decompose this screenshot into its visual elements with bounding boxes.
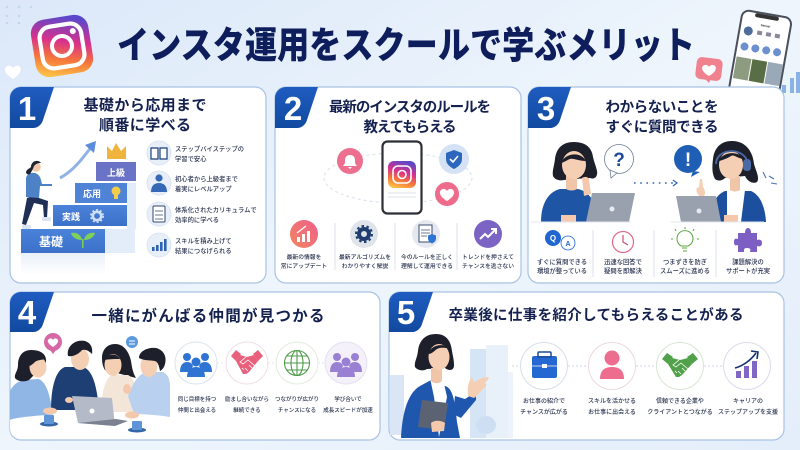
- heading 3: すぐに質問できる: [606, 119, 718, 136]
- benefit list 1: [147, 141, 257, 257]
- icon: crown: [107, 143, 126, 159]
- bubble: answer: [674, 145, 702, 177]
- features 5: お仕事に出会える: [588, 408, 636, 416]
- icon: people blue: [180, 353, 212, 377]
- icon: clock: [612, 232, 634, 252]
- panel 3: ask questions: [528, 87, 784, 283]
- features 4: 仲間と出会える: [178, 406, 216, 414]
- person A: [10, 379, 53, 421]
- heading 2: 最新のインスタのルールを: [329, 99, 491, 116]
- icon: bulb: [671, 227, 699, 251]
- person B: [51, 367, 99, 410]
- benefit list 1: 学習で安心: [175, 154, 207, 163]
- features 3: [537, 227, 771, 277]
- badge 5: 5: [397, 294, 415, 331]
- features 3: 疑問を即解決: [604, 266, 643, 275]
- icon: checklist: [153, 206, 165, 222]
- icon: instagram logo: [29, 13, 95, 79]
- person C: [102, 344, 136, 378]
- heading 4: 一緒にがんばる仲間が見つかる: [92, 306, 324, 325]
- businesswoman: [401, 334, 489, 438]
- badge 3: 3: [537, 90, 555, 127]
- heading 1: 基礎から応用まで: [84, 96, 206, 114]
- icon: handshake: [231, 350, 263, 374]
- panel 4: find companions: [10, 292, 380, 440]
- heading 2: 教えてもらえる: [364, 119, 456, 136]
- heading 1: 順番に学べる: [99, 116, 191, 134]
- features 4: 励まし合いながら: [225, 395, 269, 403]
- benefit list 1: 結果につなげられる: [175, 246, 232, 255]
- icon: bulb: [112, 186, 120, 199]
- features 5: スキルを活かせる: [588, 397, 636, 405]
- bubble: answer: !: [685, 150, 691, 171]
- cups: [40, 415, 146, 432]
- icon: shield: [439, 144, 469, 174]
- panel 1: basics to advanced: [10, 87, 266, 283]
- arrow: [60, 141, 96, 178]
- instructor with headset: [676, 141, 766, 222]
- icon: growth: [290, 220, 318, 248]
- features 3: 課題解決の: [732, 257, 764, 266]
- icon: gear: [91, 210, 103, 222]
- features 3: すぐに質問できる: [537, 257, 587, 266]
- person D: [128, 372, 170, 423]
- features 4: 継続できる: [233, 406, 261, 414]
- icon: trend: [474, 220, 502, 248]
- features 3: スムーズに進める: [660, 266, 710, 275]
- badge 5: [389, 292, 433, 332]
- group of learners: [10, 333, 170, 439]
- ground line: [531, 221, 764, 223]
- features 2: 最新アルゴリズムを: [339, 253, 391, 261]
- icon: handshake: [662, 353, 698, 377]
- staircase: 上級: [107, 167, 125, 178]
- icon: heart bubble: [44, 333, 62, 354]
- features 5: 信頼できる企業や: [656, 397, 704, 405]
- heading 5: 卒業後に仕事を紹介してもらえることがある: [448, 306, 744, 324]
- features 4: 成長スピードが加速: [323, 406, 373, 414]
- icon: globe: [284, 350, 310, 376]
- icon: Q&A: Q: [550, 234, 556, 243]
- features 3: サポートが充実: [726, 266, 771, 275]
- icon: learner: [151, 174, 167, 192]
- benefit list 1: スキルを積み上げて: [175, 236, 232, 245]
- staircase: [21, 143, 136, 275]
- icon: Q&A: A: [565, 241, 571, 248]
- bubble: question: [604, 144, 634, 178]
- bubble: question: ?: [613, 150, 625, 171]
- features 3: 環境が整っている: [537, 266, 587, 275]
- icon: gear: [350, 220, 378, 248]
- features 2: 理解して運用できる: [401, 262, 453, 270]
- features 5: チャンスが広がる: [520, 408, 568, 416]
- icon: smartphone: [726, 10, 792, 117]
- heading 1: [84, 96, 206, 134]
- panel 5: job introductions: [389, 292, 784, 440]
- table: [10, 413, 170, 439]
- benefit list 1: 初心者から上級者まで: [175, 174, 238, 183]
- icon: career chart: [735, 351, 758, 378]
- icon: puzzle: [734, 228, 762, 252]
- staircase: 応用: [83, 189, 101, 199]
- badge 1: [10, 87, 54, 128]
- features 4: 同じ目標を持つ: [178, 395, 217, 403]
- badge 4: 4: [18, 294, 37, 331]
- icon: heart speech bubble: [695, 56, 723, 83]
- icon: smartphone: Sensei: [760, 23, 771, 29]
- icon: briefcase: [532, 352, 557, 378]
- benefit list 1: 着実にレベルアップ: [175, 184, 232, 193]
- features 5: キャリアの: [733, 398, 763, 405]
- panel 2: latest instagram rules: [275, 87, 521, 283]
- icon: sprout: [71, 233, 95, 248]
- icon: growth bars: [782, 72, 800, 93]
- icon: chat bubble: [126, 336, 138, 348]
- heading 3: わからないことを: [606, 99, 718, 116]
- features 4: [175, 342, 373, 414]
- phone illustration: [324, 142, 472, 214]
- features 4: 学び合いで: [334, 395, 362, 403]
- badge 1: 1: [18, 90, 36, 127]
- title: インスタ運用をスクールで学ぶメリット: [117, 25, 695, 66]
- icon: people purple: [330, 353, 362, 377]
- features 2: 常にアップデート: [281, 262, 327, 270]
- icon: heart: [435, 182, 459, 206]
- dotted arrow: [634, 180, 677, 186]
- features 5: [512, 342, 778, 416]
- features 2: 最新の情報を: [287, 253, 322, 261]
- icon: person: [600, 350, 624, 379]
- benefit list 1: 体系化されたカリキュラムで: [175, 205, 257, 214]
- benefit list 1: 効率的に学べる: [175, 215, 219, 224]
- features 3: 迅速な回答で: [604, 257, 642, 266]
- person climbing: [22, 161, 52, 229]
- badge 3: [528, 87, 571, 128]
- student with laptop: [541, 142, 635, 222]
- badge 4: [10, 292, 54, 332]
- hands: [43, 384, 139, 418]
- icon: chart: [152, 239, 167, 251]
- badge 2: 2: [284, 90, 302, 127]
- features 2: チャンスを逃さない: [462, 262, 514, 270]
- heading 2: [329, 99, 491, 136]
- staircase: 実践: [62, 211, 80, 222]
- buildings: [390, 345, 513, 438]
- icon: book: [151, 148, 167, 159]
- features 2: わかりやすく解説: [342, 262, 388, 270]
- icon: document shield: [412, 220, 440, 248]
- icon: bell: [337, 148, 363, 174]
- heading 3: [606, 99, 718, 136]
- features 4: つながりが広がり: [275, 395, 319, 403]
- features 2: 今のルールを正しく: [401, 253, 453, 261]
- icon: Q&A: [545, 230, 575, 250]
- sparkle lines: [763, 172, 777, 184]
- dotted decoration: [6, 6, 32, 24]
- badge 2: [275, 87, 318, 128]
- features 4: チャンスになる: [278, 407, 316, 414]
- features 3: つまずきを防ぎ: [663, 257, 708, 266]
- features 5: ステップアップを支援: [718, 408, 778, 416]
- features 5: お仕事の紹介で: [523, 397, 565, 405]
- benefit list 1: ステップバイステップの: [175, 145, 244, 153]
- features 2: [281, 220, 514, 270]
- features 2: トレンドを押さえて: [462, 253, 514, 261]
- laptop: [72, 396, 128, 426]
- icon: white heart: [5, 66, 21, 79]
- features 5: クライアントとつながる: [647, 408, 713, 416]
- staircase: 基礎: [39, 234, 63, 249]
